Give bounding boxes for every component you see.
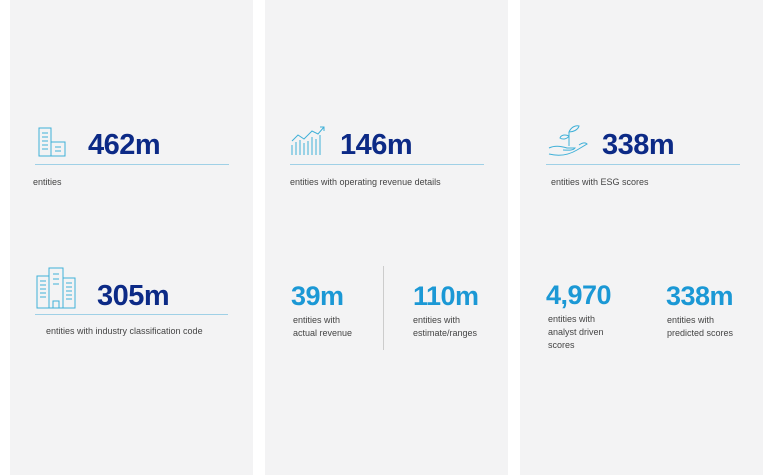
stat: 110m: estimate/ranges	[413, 328, 477, 338]
stat: 4,970	[546, 280, 611, 350]
stat: 110m: entities with	[413, 315, 460, 325]
label: entities: entities	[33, 177, 62, 187]
stat: 462m: 462m	[88, 129, 160, 161]
stat: 338m predicted: predicted scores	[667, 328, 733, 338]
stat: 110m	[413, 281, 479, 338]
stat: 338m predicted: 338m	[666, 281, 733, 311]
stat: 4,970: scores	[548, 340, 575, 350]
panel: entities	[10, 0, 253, 475]
label: industry classification: entities with industry classification code	[46, 326, 203, 336]
stat: 110m: 110m	[413, 281, 479, 311]
stat: 39m: actual revenue	[293, 328, 352, 338]
icon: bar chart growth	[292, 126, 324, 155]
stat: 338m predicted	[666, 281, 733, 338]
stat: 338m predicted: entities with	[667, 315, 714, 325]
stat: 39m	[291, 281, 352, 338]
icon: plant in hand	[548, 125, 588, 156]
stat: 146m: 146m	[340, 129, 412, 161]
stat: 305m: 305m	[97, 280, 169, 312]
stat: 39m: entities with	[293, 315, 340, 325]
stat: 4,970: entities with	[548, 314, 595, 324]
stat: 39m: 39m	[291, 281, 344, 311]
label: ESG scores: entities with ESG scores	[551, 177, 649, 187]
icon: building	[38, 128, 66, 156]
label: operating revenue: entities with operating revenue details	[290, 177, 441, 187]
stat: 338m: 338m	[602, 129, 674, 161]
stat: 4,970: analyst driven	[548, 327, 604, 337]
panel: revenue	[265, 0, 508, 475]
panel: ESG	[520, 0, 763, 475]
stat: 4,970: 4,970	[546, 280, 611, 310]
icon: buildings	[36, 268, 76, 308]
